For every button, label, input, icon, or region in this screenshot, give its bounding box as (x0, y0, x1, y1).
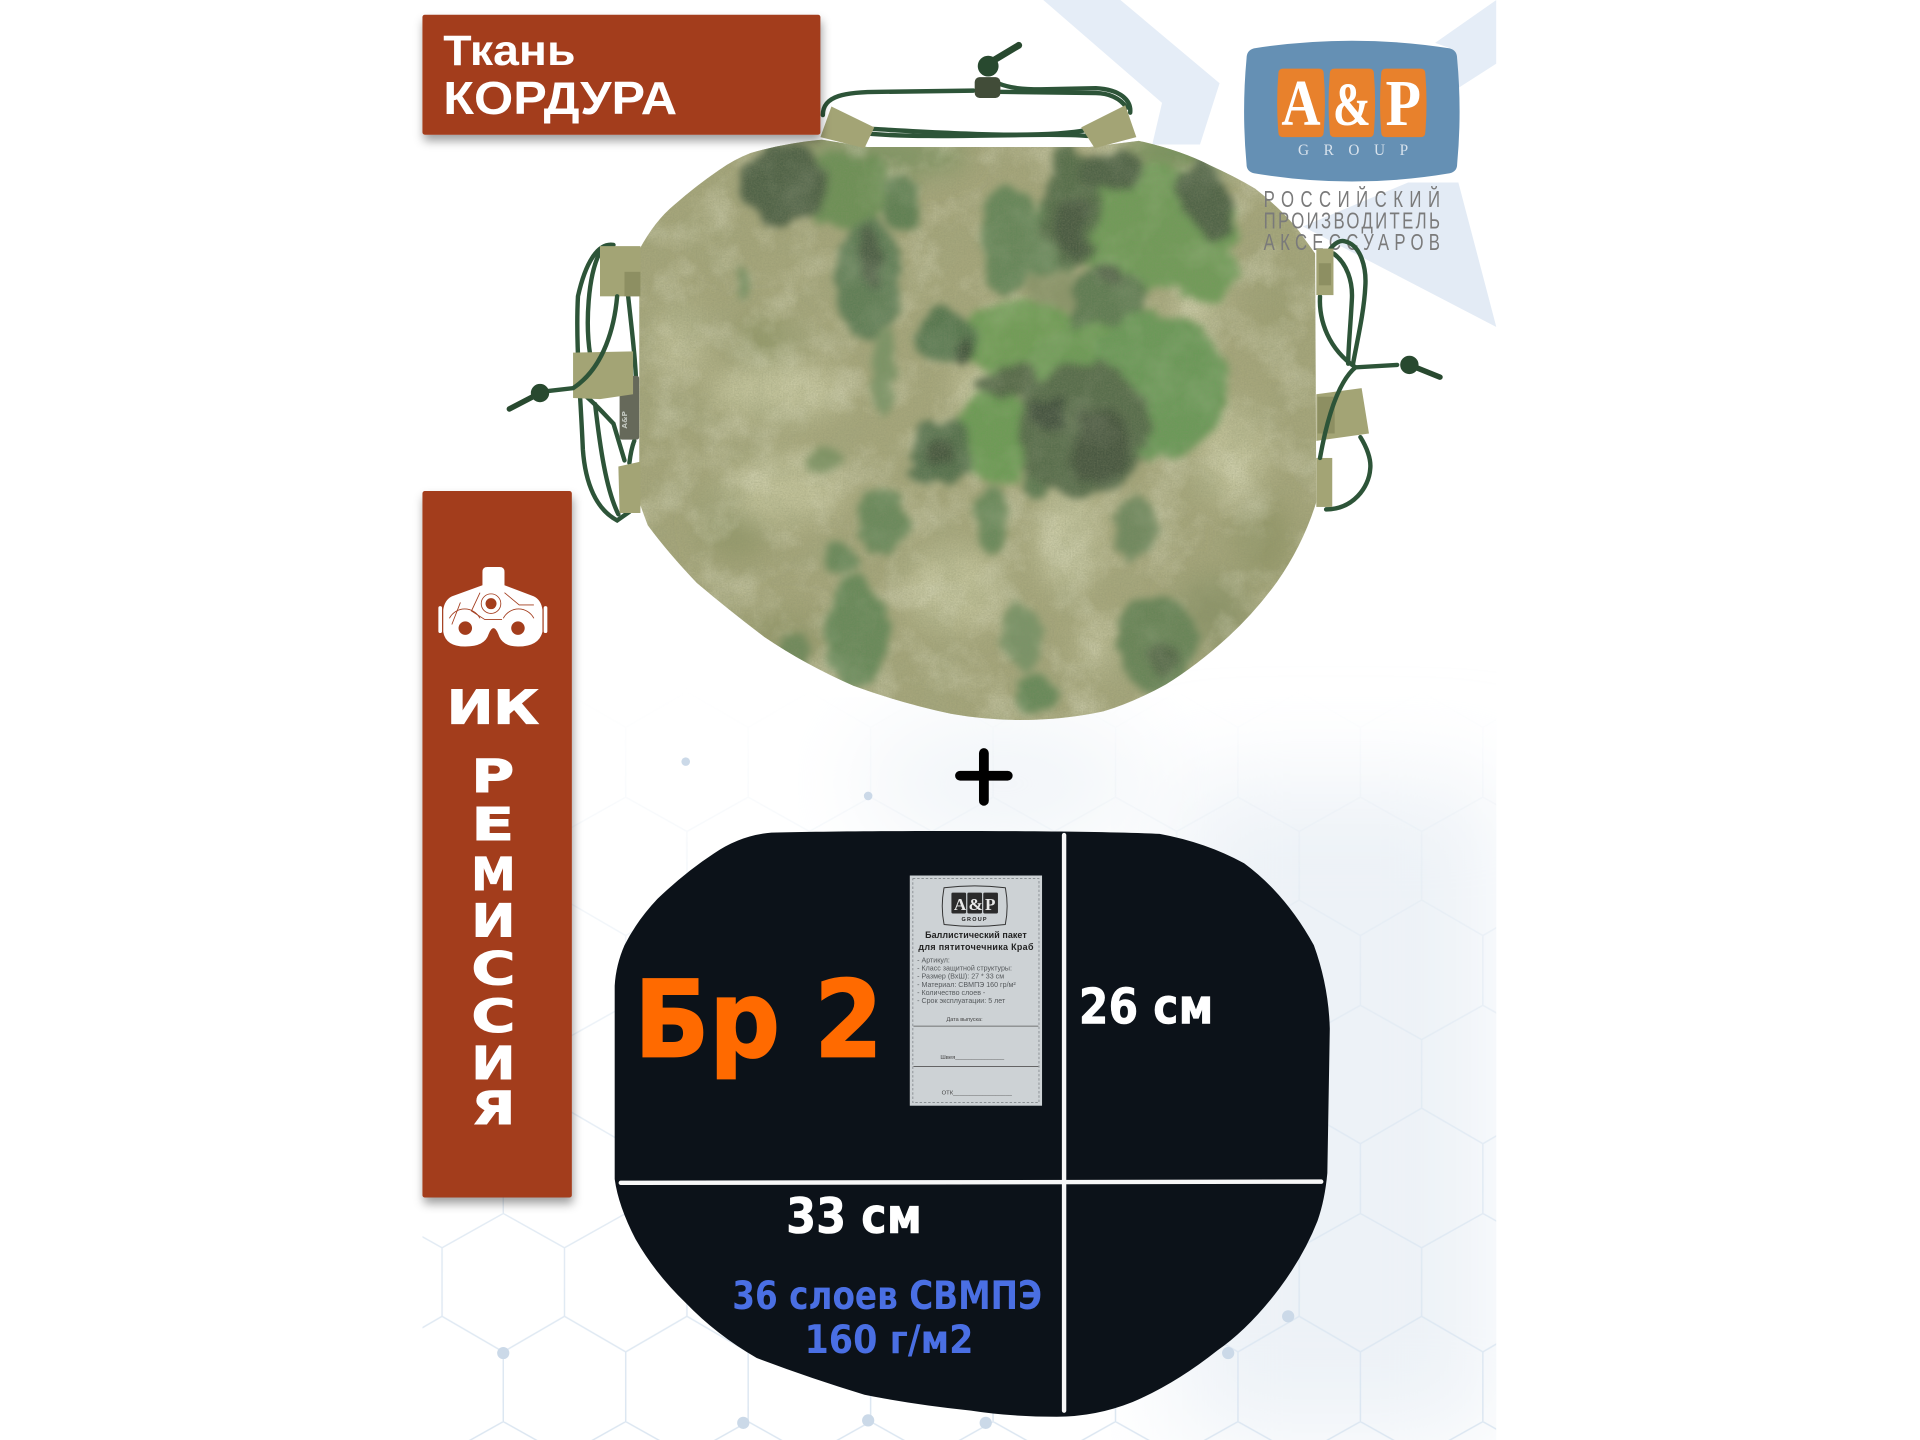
label: РЕМИССИЯ vertical: Е (471, 798, 514, 851)
label sticker: - Количество слоев - (917, 989, 986, 997)
layers specification: 36 слоев СВМПЭ (732, 1274, 1042, 1319)
label sticker: - Артикул: (917, 956, 950, 964)
label: РЕМИССИЯ vertical: С (471, 990, 516, 1043)
camouflage cover: straps and cords: A&P (620, 411, 629, 429)
ballistic plate (615, 831, 1330, 1417)
label sticker: - Размер (ВхШ): 27 * 33 см (917, 972, 1004, 980)
label sticker: Швея_______________ (940, 1055, 1005, 1061)
Br 2 protection class: Бр 2 (634, 959, 883, 1083)
layers specification: 160 г/м2 (804, 1318, 973, 1363)
logo: A&P Group: & (1333, 71, 1371, 139)
label sticker: A&P (954, 895, 996, 914)
background: star and hexagon pattern (422, 0, 1496, 1440)
logo tagline: Российский производитель аксессуаров: ПРОИЗВОДИТЕЛЬ (1264, 209, 1440, 234)
logo: A&P Group: GROUP (1298, 142, 1408, 159)
label: РЕМИССИЯ vertical: И (471, 895, 516, 948)
icon: night vision goggles (438, 567, 547, 647)
logo: A&P Group: P (1386, 67, 1421, 140)
banner: fabric type: Ткань (443, 27, 576, 75)
camouflage cover: pouch body (639, 140, 1316, 720)
layers specification (732, 1274, 1042, 1363)
banner: fabric type: КОРДУРА (443, 72, 677, 124)
label sticker: для пятиточечника Краб (918, 942, 1034, 952)
label sticker (910, 876, 1042, 1106)
label: РЕМИССИЯ vertical: М (471, 848, 516, 901)
label sticker: Баллистический пакет (925, 930, 1027, 940)
dimension: 33 cm: 33 см (786, 1188, 922, 1245)
logo tagline: Российский производитель аксессуаров: АКСЕССУАРОВ (1264, 230, 1440, 256)
logo tagline: Российский производитель аксессуаров: РОССИЙСКИЙ (1264, 185, 1440, 213)
label: РЕМИССИЯ vertical: Я (471, 1082, 516, 1135)
label sticker: GROUP (962, 917, 988, 923)
dimension: 26 cm: 26 см (1079, 979, 1213, 1036)
logo: A&P Group: A (1281, 67, 1321, 140)
logo: A&P Group (1244, 41, 1460, 182)
label: РЕМИССИЯ vertical: С (471, 942, 516, 995)
label: РЕМИССИЯ vertical: И (471, 1037, 516, 1090)
label: РЕМИССИЯ vertical: Р (471, 750, 514, 803)
label sticker: - Класс защитной структуры: (917, 964, 1012, 972)
label sticker: Дата выпуска: (947, 1017, 983, 1023)
label sticker: - Срок эксплуатации: 5 лет (917, 997, 1006, 1005)
icon: plus sign (960, 753, 1008, 801)
logo tagline: Российский производитель аксессуаров (1264, 185, 1440, 256)
label: РЕМИССИЯ vertical (471, 750, 516, 1135)
label sticker: - Материал: СВМПЭ 160 гр/м² (917, 981, 1016, 989)
infographic canvas (418, 0, 1496, 1440)
banner: fabric type (422, 15, 820, 135)
camouflage cover: straps and cords (509, 45, 1440, 520)
banner: IR remission (422, 491, 572, 1198)
label: ИК: ИК (447, 681, 539, 735)
label sticker: ОТК__________________ (942, 1091, 1013, 1097)
